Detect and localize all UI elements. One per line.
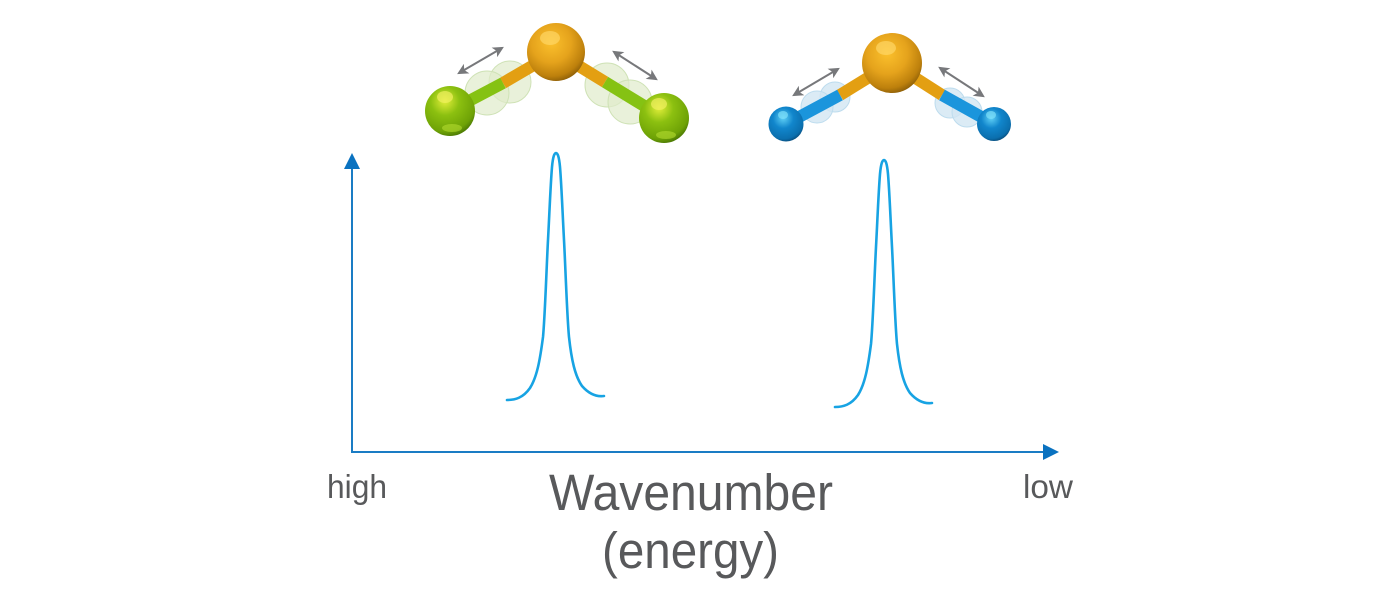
ghost atoms: right vibration positions (585, 63, 652, 124)
atom: left blue (768, 106, 804, 142)
atom: right blue (977, 107, 1011, 141)
axis title: Wavenumber: Wavenumber (549, 464, 833, 521)
label: low: low (1023, 468, 1073, 505)
ghost atoms: left vibration positions (465, 61, 531, 115)
bonds (450, 52, 664, 118)
ghost atoms: right vibration positions (935, 88, 982, 127)
atom: central gold (527, 23, 585, 81)
molecule: green and gold, larger atoms (425, 23, 689, 143)
axis subtitle: (energy): (energy) (602, 522, 779, 579)
arrow: left vibration (459, 48, 502, 73)
bonds (786, 63, 994, 124)
arrow: right vibration (614, 52, 656, 79)
spectrum peak: left (507, 153, 604, 400)
ghost atoms: left vibration positions (801, 82, 850, 123)
arrow: left vibration (794, 69, 838, 95)
y axis arrow (344, 153, 360, 452)
molecule: blue and gold, smaller outer atoms (768, 33, 1011, 142)
atom: central gold (862, 33, 922, 93)
label: high: high (327, 468, 387, 505)
x axis arrow (351, 444, 1059, 460)
atom: right green (639, 93, 689, 143)
spectrum peak: right (835, 160, 932, 407)
atom: left green (425, 86, 475, 136)
arrow: right vibration (940, 68, 983, 96)
